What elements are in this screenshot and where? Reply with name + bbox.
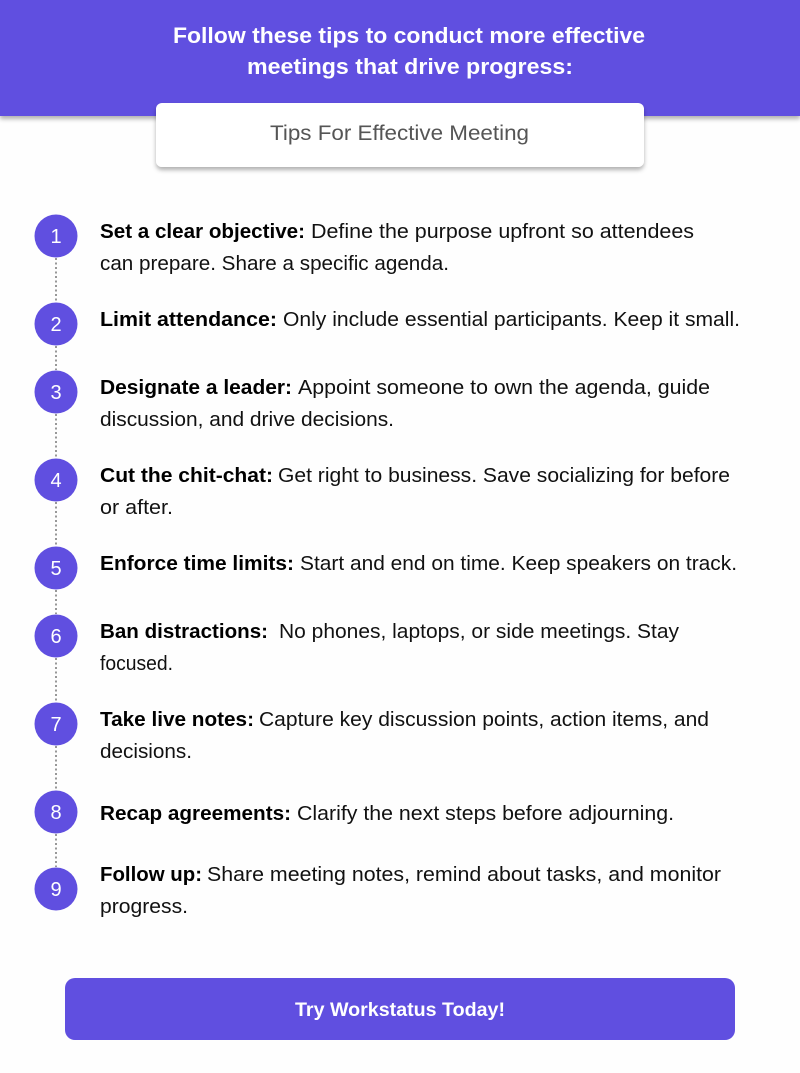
title [173, 23, 645, 79]
header banner [0, 0, 800, 116]
tip 1: Set a clear objective: [100, 220, 305, 243]
tip 9 [34, 863, 721, 918]
tip 8 [34, 790, 674, 834]
tip 7: 7 [50, 714, 62, 736]
tip 4: Cut the chit-chat: [100, 464, 273, 487]
tip 5 [34, 546, 737, 590]
tip 3 [34, 370, 710, 431]
tip 7: Take live notes: [100, 708, 254, 731]
tip 8: Clarify the next steps before adjourning. [297, 802, 674, 825]
tip 2: Only include essential participants. Keep it small. [283, 308, 740, 331]
tip 6: Ban distractions: [100, 620, 268, 643]
tip 2 [34, 302, 740, 346]
tip 2: 2 [50, 314, 62, 336]
tip 8: 8 [50, 802, 62, 824]
tip 4: or after. [100, 496, 173, 519]
tip 3: Appoint someone to own the agenda, guide [298, 376, 710, 399]
tip 7: Capture key discussion points, action items, and [259, 708, 709, 731]
tip 6: 6 [50, 626, 62, 648]
tip 3: Designate a leader: [100, 376, 292, 399]
tip 4: Get right to business. Save socializing for before [278, 464, 730, 487]
tip 4 [34, 458, 730, 519]
tip 4: 4 [50, 470, 62, 492]
timeline connector [55, 258, 57, 867]
title: Follow these tips to conduct more effective [173, 23, 645, 48]
subtitle card [156, 103, 644, 167]
tip 1: can prepare. Share a specific agenda. [100, 252, 449, 275]
tip 8: Recap agreements: [100, 802, 291, 825]
tip 5: Enforce time limits: [100, 552, 294, 575]
tip 1: Define the purpose upfront so attendees [311, 220, 694, 243]
subtitle card: Tips For Effective Meeting [270, 122, 529, 145]
tip 2: Limit attendance: [100, 308, 277, 331]
tip 3: discussion, and drive decisions. [100, 408, 394, 431]
tip 6: focused. [100, 652, 173, 675]
tip 5: 5 [50, 558, 62, 580]
tip 5: Start and end on time. Keep speakers on track. [300, 552, 737, 575]
tip 6: No phones, laptops, or side meetings. Stay [279, 620, 680, 643]
tip 7 [34, 702, 709, 763]
tip 1 [34, 214, 694, 275]
tip 9: progress. [100, 895, 188, 918]
tip 6 [34, 614, 680, 675]
tip 9: 9 [50, 879, 62, 901]
tip 9: Share meeting notes, remind about tasks, and monitor [207, 863, 721, 886]
tip 3: 3 [50, 382, 62, 404]
tip 7: decisions. [100, 740, 192, 763]
title: meetings that drive progress: [247, 54, 573, 79]
tip 1: 1 [50, 226, 62, 248]
call to action button: Try Workstatus Today! [295, 1000, 505, 1021]
call to action button [65, 978, 735, 1040]
tip 9: Follow up: [100, 863, 202, 886]
